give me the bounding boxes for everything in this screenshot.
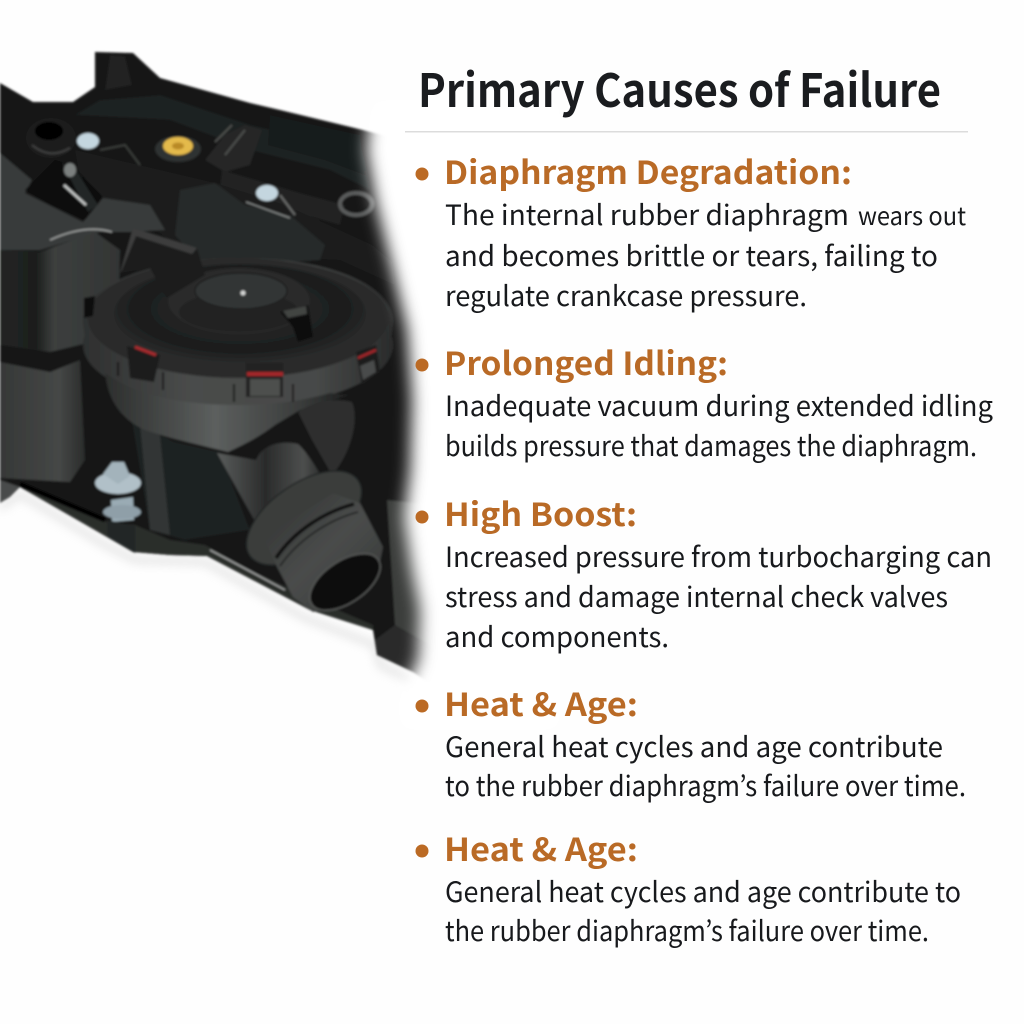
body 3: and components. <box>445 616 669 656</box>
body 2: builds pressure that damages the diaphragm. <box>445 425 977 465</box>
mounting bolt <box>95 462 141 553</box>
rim clip: left <box>127 346 160 382</box>
bullet 3 <box>416 510 428 524</box>
product photo: valve cover with PCV valve <box>0 52 560 730</box>
nozzle flange <box>230 452 378 584</box>
cause 2: prolonged idling <box>416 339 993 465</box>
lower body column <box>132 422 250 540</box>
white fade on right edge of photo <box>366 100 560 730</box>
central sloped ridge <box>75 150 395 285</box>
heading 4: Heat & Age: <box>444 680 638 726</box>
dome clip <box>280 305 313 342</box>
cause 4: heat and age <box>416 680 966 805</box>
left top surface <box>0 153 165 250</box>
body 4: to the rubber diaphragm’s failure over time. <box>445 765 966 805</box>
body 1: The internal rubber diaphragm <box>445 194 849 234</box>
bullet 5 <box>416 844 428 858</box>
body 5: General heat cycles and age contribute to <box>445 871 961 911</box>
cause 3: high boost <box>416 490 992 656</box>
cap ring <box>83 228 393 405</box>
bullet 2 <box>416 358 428 372</box>
rear rail highlights <box>75 55 370 225</box>
bullet 1 <box>416 168 428 180</box>
body 1: wears out <box>858 197 967 233</box>
body 1 <box>445 194 967 315</box>
soft contact shadow <box>0 494 412 680</box>
heading 3: High Boost: <box>444 490 637 536</box>
heading 1: Diaphragm Degradation: <box>444 148 852 194</box>
ball joint fitting <box>25 118 103 220</box>
body 2 <box>445 385 993 465</box>
cause 1: diaphragm degradation <box>416 148 967 315</box>
cap top surface <box>88 258 388 378</box>
centre disc <box>195 273 287 309</box>
left lower housing <box>0 360 85 482</box>
silver bolts on rail <box>77 133 295 215</box>
yellow plug <box>155 136 201 162</box>
nozzle body <box>263 493 383 612</box>
title: Primary Causes of Failure <box>418 55 941 121</box>
body 1: and becomes brittle or tears, failing to <box>445 235 938 275</box>
heading 5: Heat & Age: <box>444 825 638 871</box>
funnel right shoulder <box>298 400 355 475</box>
funnel below cap <box>105 370 350 452</box>
right bracket <box>387 500 432 650</box>
body 4: General heat cycles and age contribute <box>445 726 943 766</box>
bullet 4 <box>416 700 428 712</box>
tube to nozzle <box>217 443 325 525</box>
body 5 <box>445 871 961 950</box>
body 4 <box>445 726 966 805</box>
body 1: regulate crankcase pressure. <box>445 275 807 315</box>
body 5: the rubber diaphragm’s failure over time. <box>445 910 929 950</box>
rim clip: far left notch <box>84 296 95 318</box>
title divider <box>405 131 968 132</box>
nozzle opening <box>300 542 390 622</box>
body 3 <box>445 536 992 656</box>
body 2: Inadequate vacuum during extended idling <box>445 385 993 425</box>
body 3: stress and damage internal check valves <box>445 576 948 616</box>
heading 2: Prolonged Idling: <box>444 339 728 385</box>
rim clip: right <box>356 345 380 385</box>
locating tab <box>120 228 205 298</box>
cap lower band shadow <box>83 283 393 407</box>
rim clip: centre <box>246 363 283 397</box>
nozzle groove <box>276 504 354 558</box>
left box body <box>0 232 120 355</box>
valve cover silhouette <box>0 52 450 690</box>
small ring fitting at right <box>340 193 372 215</box>
body 3: Increased pressure from turbocharging can <box>445 536 992 576</box>
lower flange <box>20 487 373 630</box>
inner dome <box>168 268 310 334</box>
cause 5: heat and age repeat <box>416 825 961 950</box>
